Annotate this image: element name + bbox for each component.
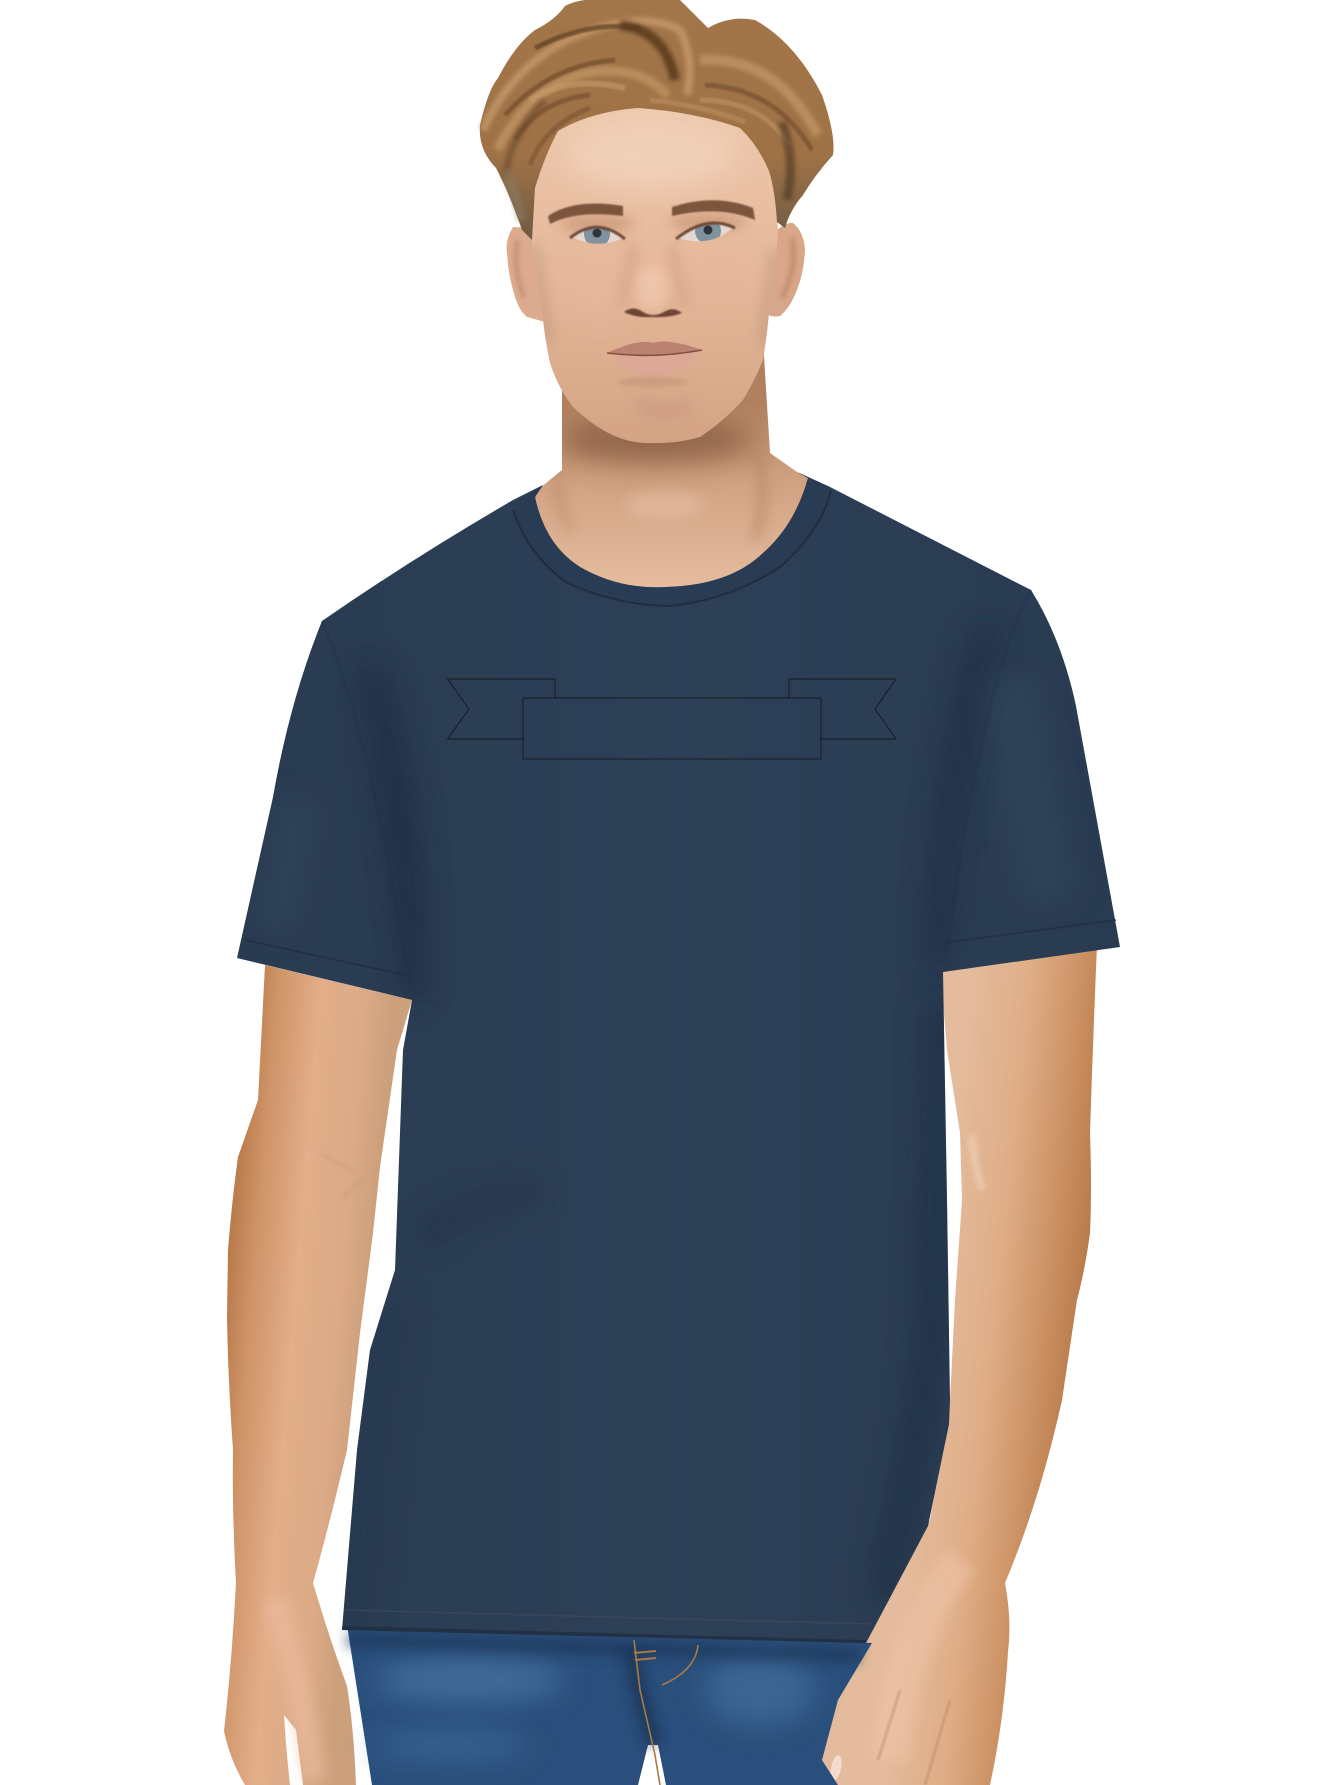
ear left (507, 227, 545, 322)
right arm and hand (822, 945, 1097, 1785)
left arm and hand (224, 965, 412, 1785)
face (530, 80, 778, 443)
folds and shading (275, 630, 1050, 1642)
shirt body and sleeves (237, 472, 1120, 1643)
eye right (674, 220, 736, 242)
brows (548, 204, 623, 224)
sleeve seams and cuffs (322, 621, 410, 985)
illustration: man wearing navy t-shirt (224, 0, 1120, 1785)
eye sockets (559, 215, 635, 233)
ribbon centre panel (523, 698, 821, 759)
head (480, 0, 834, 443)
t-shirt (237, 472, 1120, 1643)
ear right (765, 223, 805, 316)
neck (535, 354, 808, 588)
hair (480, 0, 834, 240)
mouth (607, 342, 702, 387)
ribbon left tail (448, 679, 555, 739)
nose (620, 245, 686, 317)
ribbon right tail (789, 679, 896, 739)
ribbon banner outline (448, 679, 896, 759)
elbow crease (320, 1153, 367, 1200)
jeans (347, 1625, 872, 1785)
eye left (568, 224, 626, 244)
collar (513, 472, 830, 606)
